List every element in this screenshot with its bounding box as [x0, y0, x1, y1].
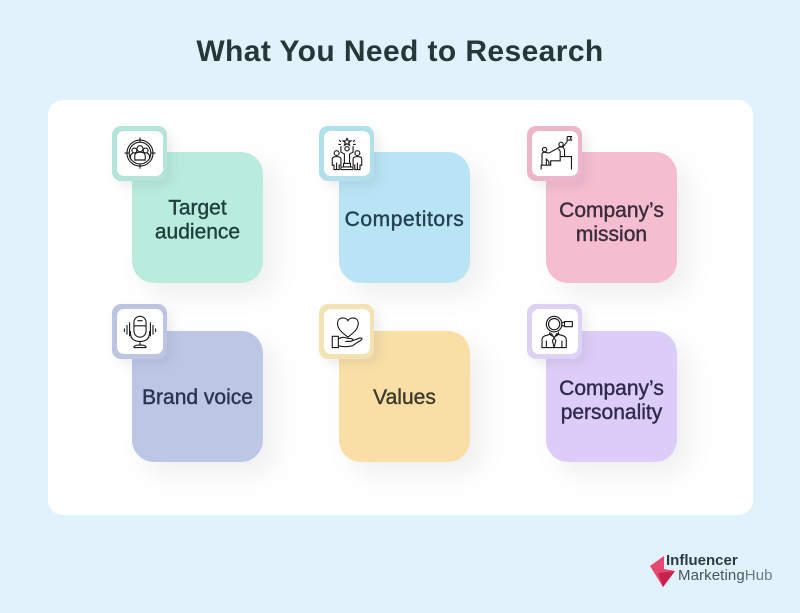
card: values: Values	[373, 386, 436, 409]
card: company's mission: Company’s	[559, 199, 664, 222]
icon: logo diamond	[650, 556, 675, 587]
card: competitors	[339, 152, 470, 283]
card: values	[339, 331, 470, 462]
card: target audience	[132, 152, 263, 283]
icon: brand voice	[112, 304, 167, 359]
card: brand voice	[132, 331, 263, 462]
logo text: Influencer	[666, 552, 738, 569]
title: What You Need to Research	[196, 35, 604, 68]
card: brand voice: Brand voice	[142, 386, 253, 409]
card: competitors: Competitors	[345, 208, 464, 231]
card: company's mission: mission	[576, 222, 647, 246]
logo: Influencer Marketing Hub	[650, 552, 773, 587]
icon: company's mission	[527, 126, 582, 181]
card: target audience: audience	[155, 220, 240, 243]
icon: competitors	[319, 126, 374, 181]
icon: target audience	[112, 126, 167, 181]
icon: values	[319, 304, 374, 359]
card: company's mission	[546, 152, 677, 283]
icon: company's personality	[527, 304, 582, 359]
logo text: MarketingHub	[678, 567, 773, 584]
card: company's personality: personality	[561, 400, 662, 424]
logo text	[666, 552, 773, 584]
card: company's personality: Company’s	[559, 377, 664, 400]
panel: research items	[48, 100, 753, 515]
card: company's personality	[546, 331, 677, 462]
card: target audience: Target	[168, 196, 227, 220]
